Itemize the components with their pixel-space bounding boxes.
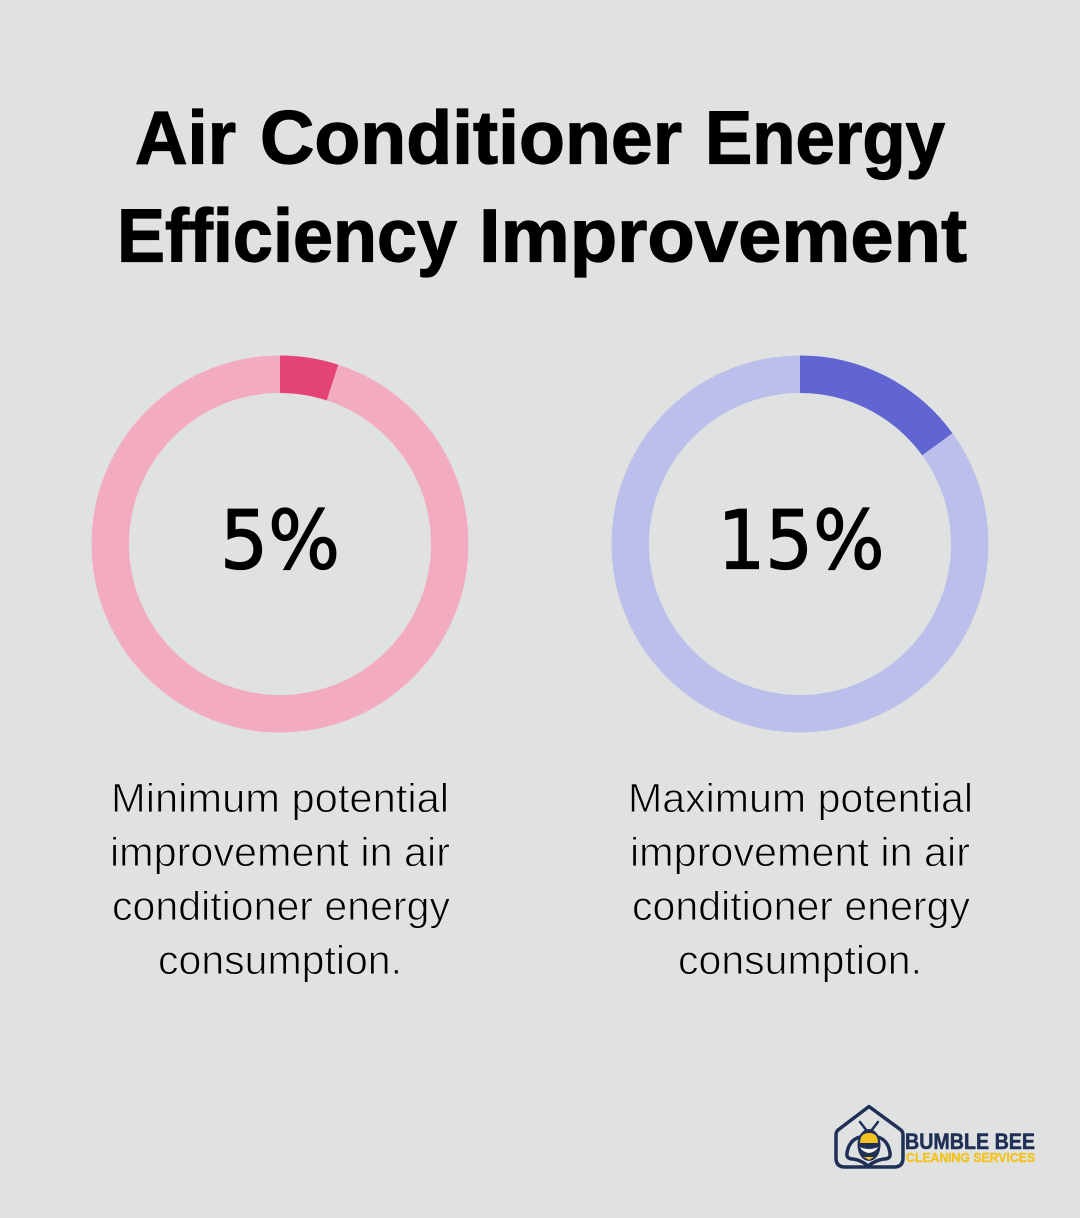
logo tagline: CLEANING SERVICES [906, 1150, 1035, 1165]
title: Air [135, 96, 236, 180]
title: Conditioner [260, 96, 682, 180]
title: Energy [705, 96, 945, 180]
title [117, 96, 967, 278]
text: maximum description [628, 775, 973, 983]
text: maximum description: consumption. [678, 937, 922, 983]
text: maximum description: improvement in air [630, 829, 970, 875]
logo: Bumble Bee Cleaning Services [836, 1106, 1035, 1167]
logo wordmark: BUMBLE BEE [905, 1129, 1035, 1154]
text: minimum description: Minimum potential [111, 775, 449, 821]
donut chart: 5% [110, 374, 450, 714]
text: minimum description [110, 775, 450, 983]
donut chart: 5%: 5% [220, 494, 340, 588]
text: maximum description: Maximum potential [628, 775, 973, 821]
panel: minimum improvement [110, 374, 450, 983]
text: maximum description: conditioner energy [632, 883, 970, 929]
donut chart: 15%: 15% [718, 494, 884, 588]
icon: bee in house [836, 1106, 903, 1167]
donut chart: 15% [630, 374, 970, 714]
panel: maximum improvement [628, 374, 973, 983]
text: minimum description: conditioner energy [112, 883, 450, 929]
text: minimum description: consumption. [158, 937, 402, 983]
text: minimum description: improvement in air [110, 829, 450, 875]
title: Efficiency [117, 194, 457, 278]
title: Improvement [479, 194, 967, 278]
